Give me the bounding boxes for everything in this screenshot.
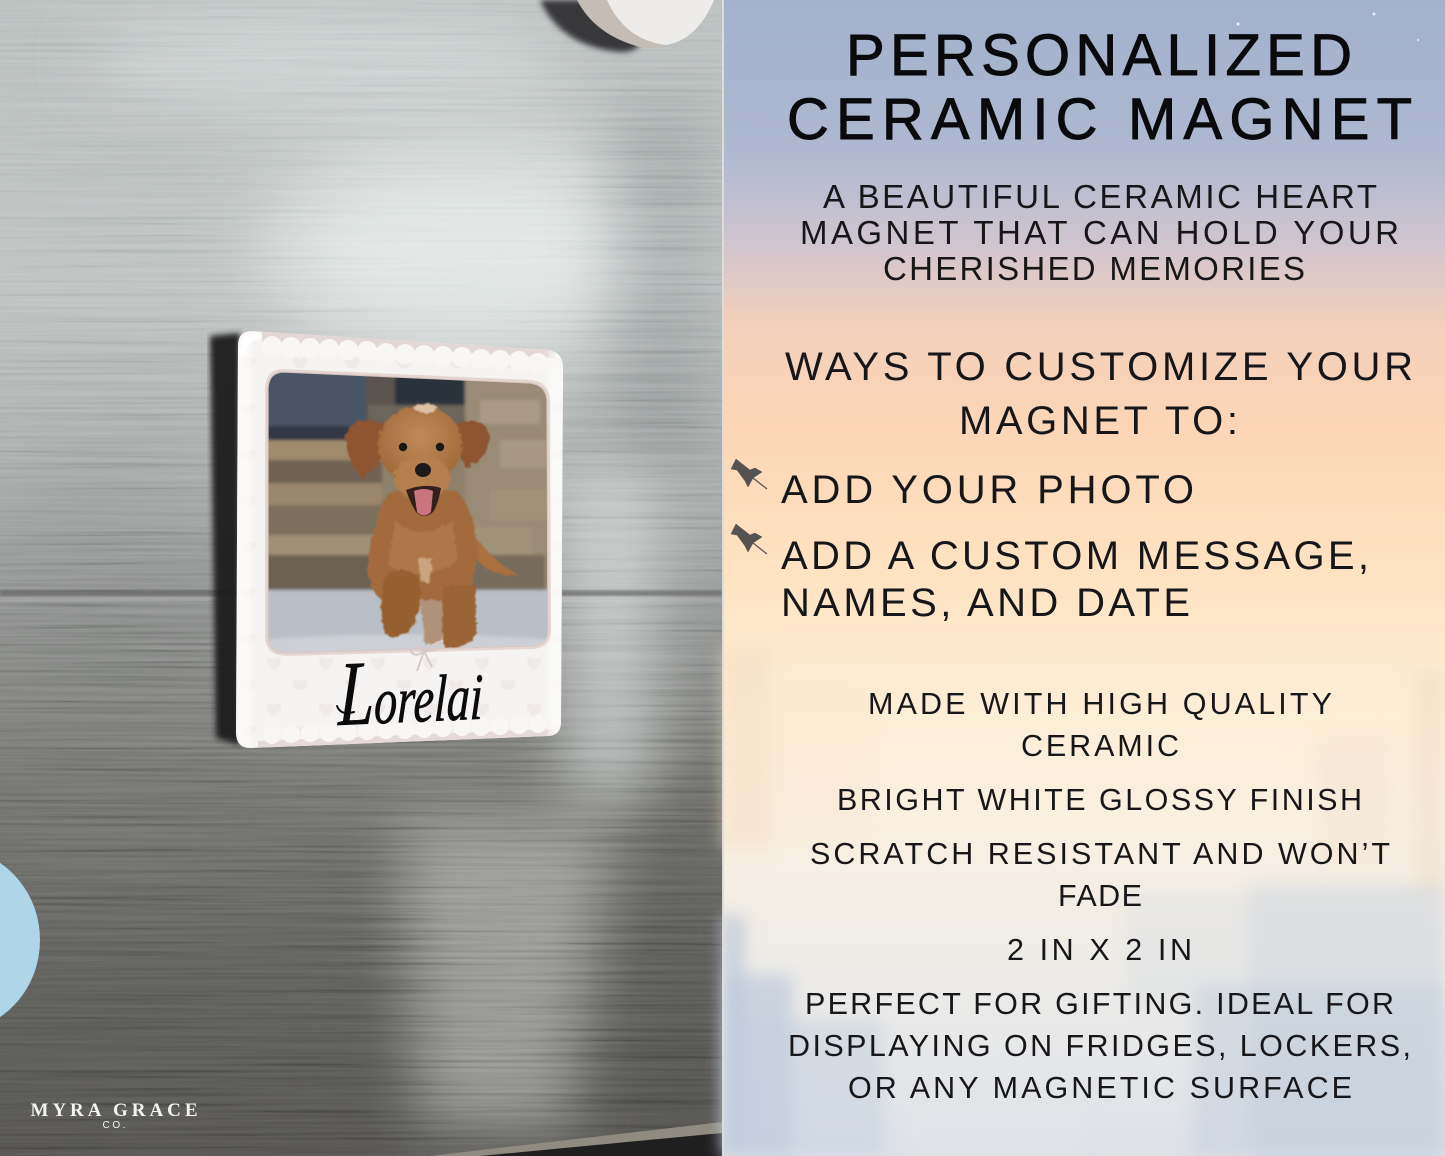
puppy (345, 404, 518, 648)
icon: push pin 2 (731, 524, 767, 554)
list item: add a custom message: NAMES, AND DATE (781, 581, 1190, 625)
decorative pink scalloped border (236, 330, 565, 750)
logo: Myra Grace Co.: MYRA GRACE (30, 1100, 198, 1121)
subtitle: A BEAUTIFUL CERAMIC HEART (823, 178, 1377, 215)
panel: brushed steel fridge photo (0, 0, 722, 1156)
title (787, 23, 1412, 152)
feature list (788, 687, 1411, 1105)
feature list: MADE WITH HIGH QUALITY (868, 687, 1332, 721)
icon: push pin 1 (731, 459, 767, 489)
heading: ways to customize (785, 345, 1413, 443)
feature list: CERAMIC (1021, 729, 1179, 763)
name: Lorelai (336, 663, 482, 726)
photo: running puppy (262, 370, 555, 660)
icon: pink bow (411, 641, 442, 671)
panel: pastel sky background (722, 0, 1445, 1156)
list item: add a custom message: ADD A CUSTOM MESSAGE, (781, 534, 1369, 578)
icon: white round fridge magnet at top (540, 0, 714, 52)
feature list: FADE (1058, 879, 1142, 913)
feature list: OR ANY MAGNETIC SURFACE (848, 1071, 1352, 1105)
feature list: DISPLAYING ON FRIDGES, LOCKERS, (788, 1029, 1411, 1063)
heading: ways to customize: MAGNET TO: (959, 399, 1238, 443)
decorative faint city skyline (722, 648, 1445, 1156)
panel: ceramic magnet (210, 330, 565, 750)
feature list: BRIGHT WHITE GLOSSY FINISH (837, 783, 1362, 817)
title: PERSONALIZED (846, 23, 1352, 88)
list item: add your photo: ADD YOUR PHOTO (781, 468, 1194, 512)
list item: add a custom message (781, 534, 1369, 625)
subtitle (800, 178, 1399, 287)
feature list: 2 IN X 2 IN (1007, 933, 1192, 967)
subtitle: CHERISHED MEMORIES (883, 250, 1305, 287)
subtitle: MAGNET THAT CAN HOLD YOUR (800, 214, 1399, 251)
heading: ways to customize: WAYS TO CUSTOMIZE YOUR (785, 345, 1413, 389)
title: CERAMIC MAGNET (787, 87, 1412, 152)
logo: Myra Grace Co. (30, 1104, 197, 1128)
feature list: SCRATCH RESISTANT AND WON’T (810, 837, 1390, 871)
feature list: PERFECT FOR GIFTING. IDEAL FOR (805, 987, 1394, 1021)
icon: blue round magnet at left edge (0, 863, 40, 1017)
name: Lorelai: Lorelai (337, 638, 484, 746)
logo: Myra Grace Co.: CO. (102, 1120, 126, 1131)
